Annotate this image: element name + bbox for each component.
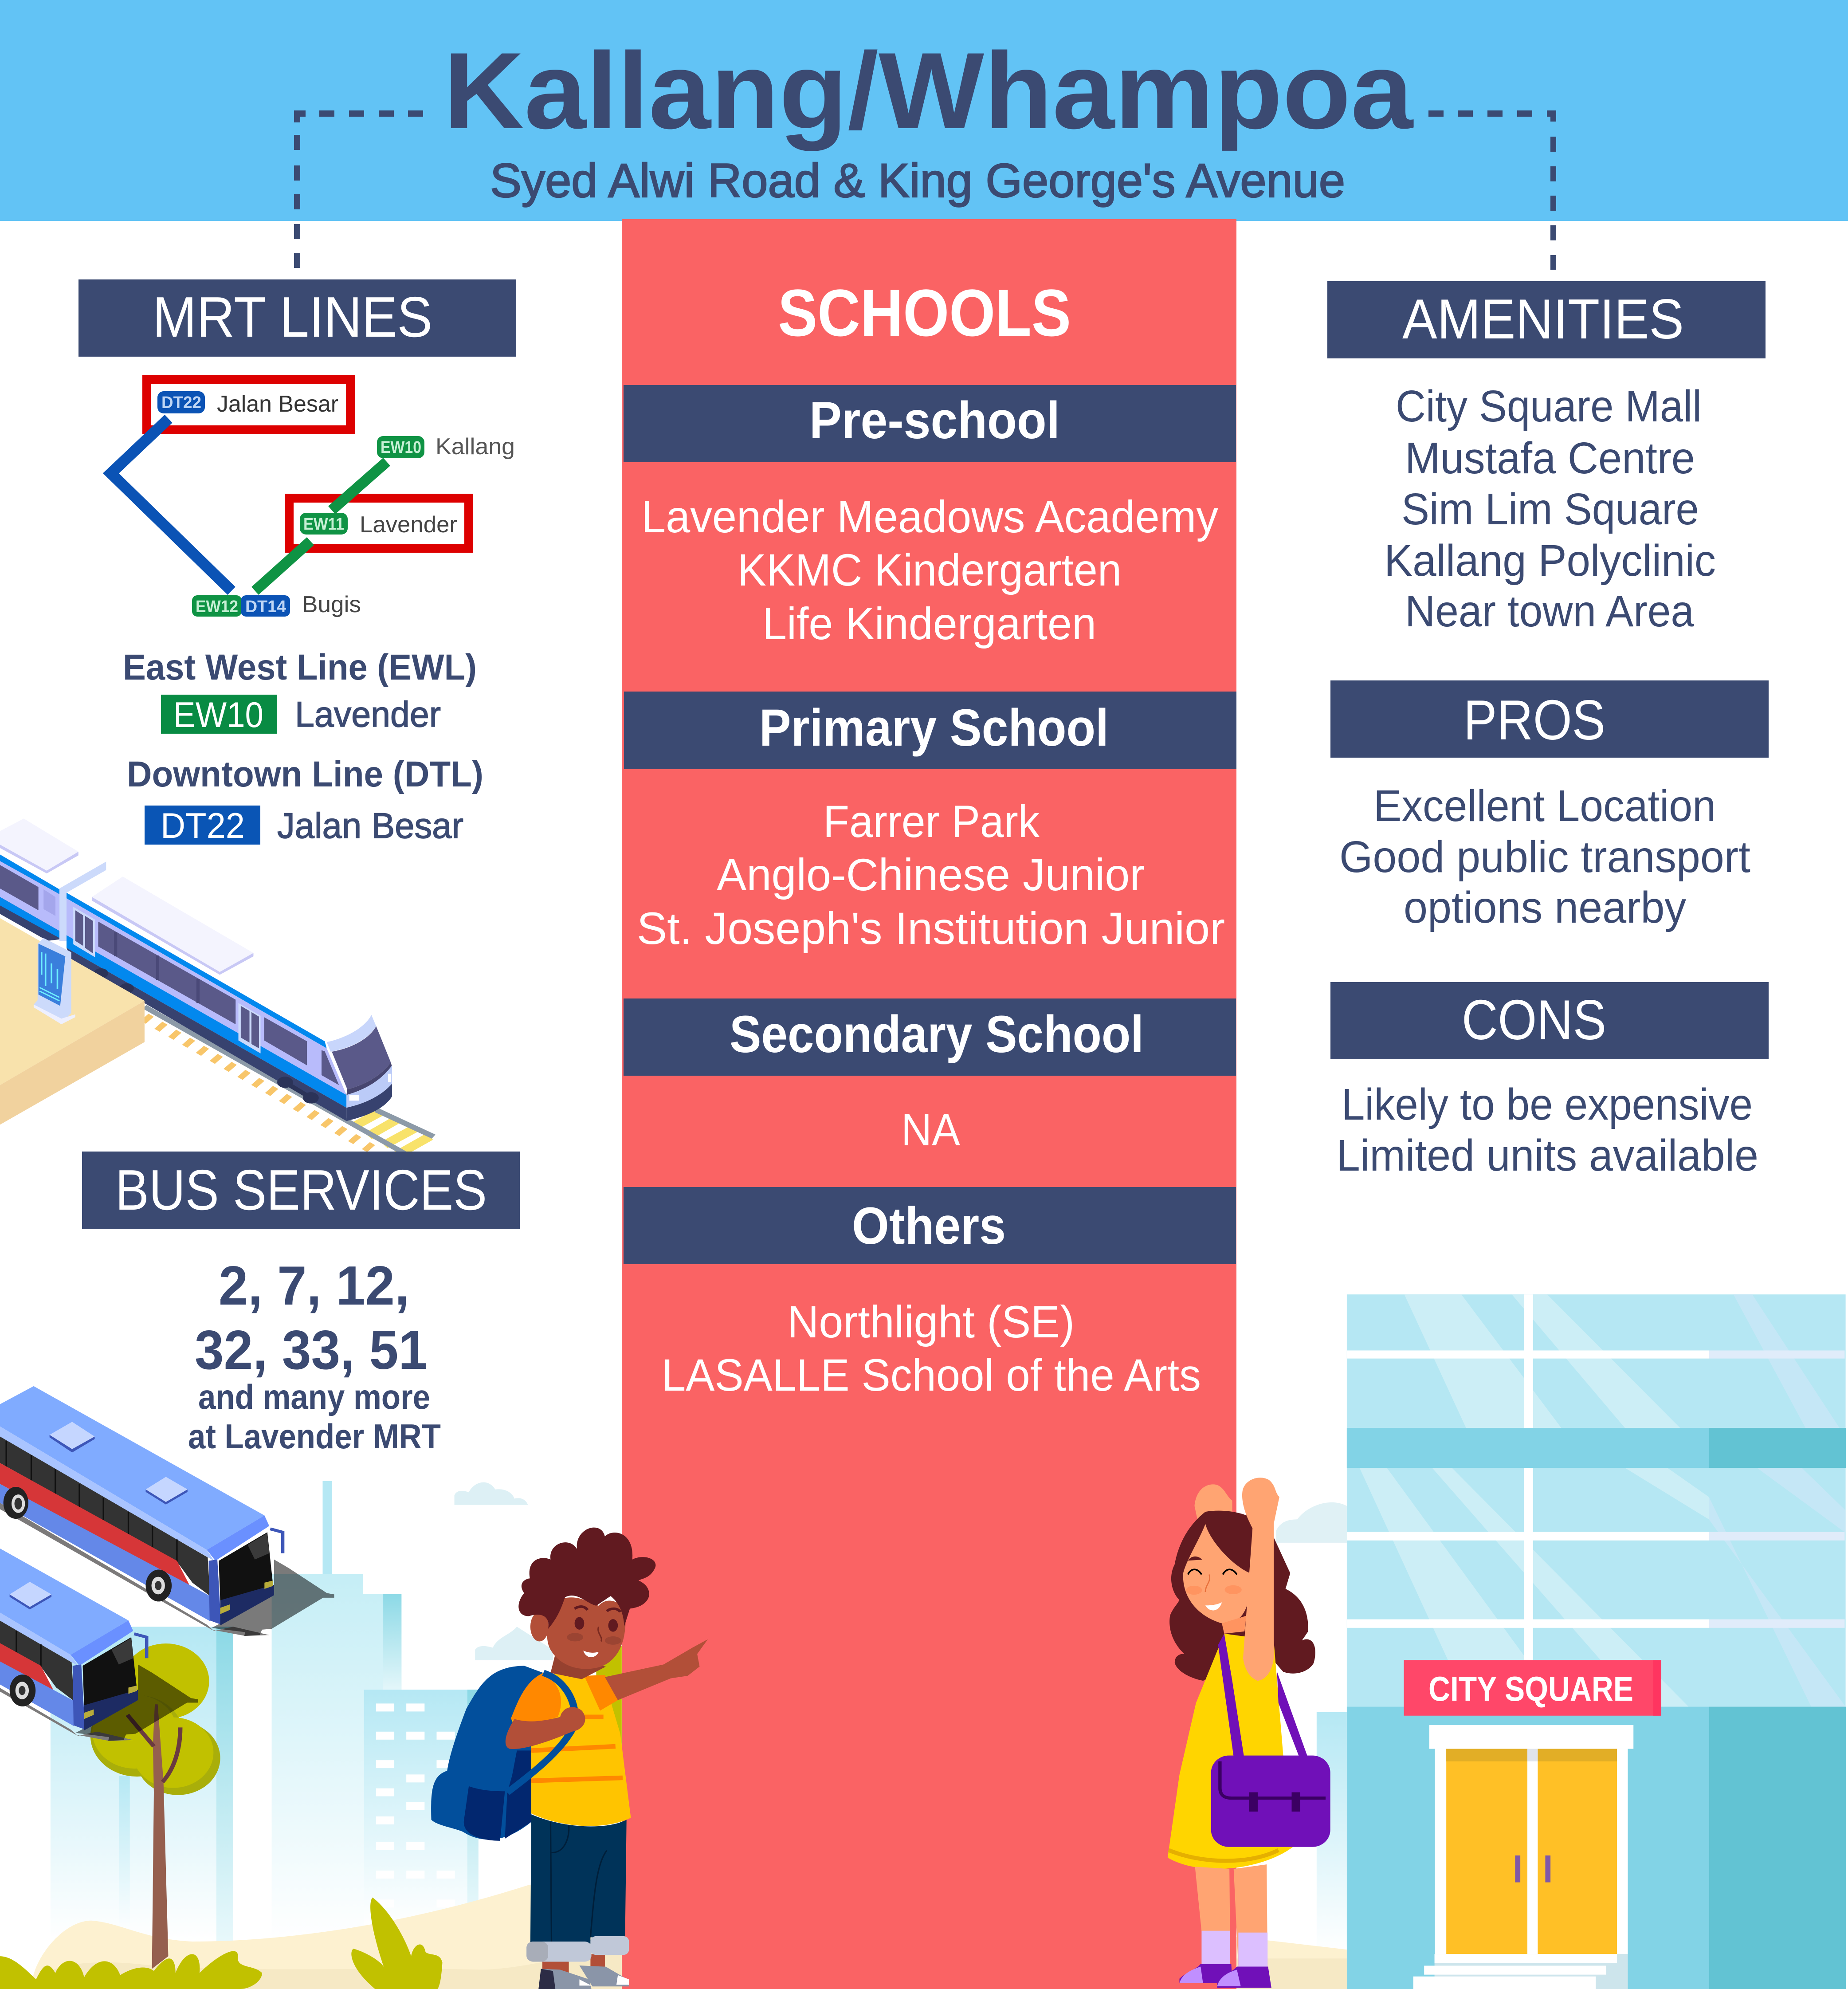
- panel: schools: [622, 219, 1236, 1989]
- bus numbers: at Lavender MRT: [188, 1417, 441, 1456]
- boy legs and shoes: [538, 1954, 629, 1989]
- bus numbers: and many more: [198, 1377, 430, 1416]
- illustration: building backdrop right: [1231, 1294, 1846, 1989]
- secondary school section: [624, 998, 1236, 1155]
- backpack pocket: [464, 1750, 531, 1841]
- MRT map: EW11: [303, 515, 344, 534]
- Downtown Line legend: Downtown Line (DTL): [127, 754, 483, 794]
- panel: cons: [1330, 982, 1769, 1180]
- MRT map: Jalan Besar: [217, 391, 338, 417]
- legs: [1179, 1864, 1271, 1988]
- panel: amenities: City Square Mall: [1396, 381, 1702, 431]
- sign board: [1404, 1660, 1661, 1716]
- MRT map: EW10: [381, 438, 421, 457]
- primary school section: [624, 692, 1236, 954]
- dashed connector: right: [1428, 110, 1556, 270]
- panel: amenities: Near town Area: [1405, 586, 1694, 636]
- train: [0, 847, 392, 1121]
- face: [1183, 1524, 1250, 1623]
- others section: [624, 1187, 1236, 1400]
- panel: amenities: AMENITIES: [1402, 287, 1684, 350]
- sand: [1231, 1936, 1347, 1989]
- shoulder bag: [1211, 1756, 1330, 1847]
- bag strap: [1218, 1634, 1308, 1757]
- train roof panels: [0, 818, 253, 975]
- title: Kallang/Whampoa: [443, 30, 1414, 151]
- East West Line legend: EW10: [173, 695, 263, 735]
- primary school section: Anglo-Chinese Junior: [717, 849, 1145, 900]
- sand ground: [31, 1876, 622, 1989]
- schools heading: SCHOOLS: [778, 275, 1071, 350]
- pre-school section: Life Kindergarten: [762, 598, 1096, 649]
- skyline: [51, 1481, 479, 1942]
- panel: pros: Good public transport: [1339, 832, 1750, 882]
- Downtown Line legend: Jalan Besar: [277, 806, 463, 846]
- panel: amenities: Sim Lim Square: [1401, 484, 1699, 534]
- panel: pros: PROS: [1463, 688, 1605, 751]
- head: [518, 1528, 655, 1679]
- bus numbers: [188, 1255, 441, 1456]
- bushes: [0, 1898, 442, 1989]
- bus numbers: 2, 7, 12,: [219, 1255, 409, 1317]
- pre-school section: Lavender Meadows Academy: [641, 491, 1218, 542]
- East West Line legend: [123, 647, 477, 735]
- panel: cons: CONS: [1462, 988, 1606, 1051]
- pre-school section: Pre-school: [809, 391, 1060, 450]
- bus: lower: [0, 1491, 198, 1741]
- illustration: boy with backpack: [431, 1528, 708, 1989]
- door: [1413, 1725, 1633, 1989]
- others section: Others: [852, 1197, 1006, 1255]
- primary school section: Primary School: [759, 699, 1109, 757]
- panel: amenities: Mustafa Centre: [1405, 433, 1695, 483]
- track: [145, 1007, 434, 1154]
- backpack: [431, 1666, 543, 1840]
- others section: Northlight (SE): [787, 1297, 1075, 1347]
- subtitle: Syed Alwi Road & King George's Avenue: [490, 153, 1345, 207]
- East West Line legend: Lavender: [295, 695, 441, 735]
- station kiosk: [34, 938, 75, 1024]
- primary school section: Farrer Park: [823, 796, 1040, 847]
- panel: pros: options nearby: [1404, 883, 1686, 932]
- platform: [0, 918, 145, 1125]
- panel: cons: Limited units available: [1336, 1131, 1758, 1180]
- other arm and strap: [506, 1673, 585, 1792]
- City Square building: [1347, 1294, 1846, 1989]
- clouds: [455, 1482, 553, 1660]
- Downtown Line legend: [127, 754, 483, 846]
- panel: pros: Excellent Location: [1373, 781, 1716, 831]
- dress: [1168, 1634, 1294, 1869]
- bus numbers: 32, 33, 51: [195, 1320, 428, 1381]
- raised hand behind head: [1194, 1484, 1232, 1524]
- MRT map: [111, 380, 515, 617]
- shirt: [510, 1673, 631, 1826]
- panel: MRT lines heading: [78, 279, 516, 357]
- illustration: girl with bag: [1168, 1478, 1330, 1988]
- panel: MRT lines heading: MRT LINES: [153, 285, 432, 349]
- cloud and small building: [1276, 1502, 1347, 1954]
- MRT map: Kallang: [436, 434, 515, 460]
- East West Line legend: East West Line (EWL): [123, 647, 477, 688]
- bus: upper: [0, 1386, 334, 1636]
- MRT map: EW12: [196, 597, 238, 616]
- panel: pros: [1330, 680, 1769, 932]
- secondary school section: NA: [901, 1105, 960, 1155]
- boy trousers: [526, 1814, 629, 1961]
- tree: [90, 1643, 220, 1969]
- Downtown Line legend: DT22: [161, 806, 245, 846]
- others section: LASALLE School of the Arts: [662, 1350, 1201, 1400]
- pre-school section: [624, 385, 1236, 649]
- dashed connector: left: [294, 110, 423, 268]
- hair: [1169, 1511, 1315, 1681]
- pre-school section: KKMC Kindergarten: [738, 545, 1122, 595]
- panel: amenities: [1327, 281, 1766, 636]
- raised arm: [1242, 1478, 1279, 1681]
- panel: amenities: Kallang Polyclinic: [1384, 536, 1716, 586]
- header banner: [0, 0, 1848, 221]
- MRT map: Bugis: [302, 592, 361, 617]
- pointing arm: [605, 1639, 708, 1700]
- MRT map: Lavender: [360, 512, 457, 538]
- primary school section: St. Joseph's Institution Junior: [637, 903, 1225, 954]
- sign text: CITY SQUARE: [1428, 1669, 1633, 1708]
- illustration: train at platform: [0, 818, 434, 1154]
- MRT map: DT22: [161, 393, 201, 412]
- panel: cons: Likely to be expensive: [1342, 1080, 1753, 1129]
- MRT map: DT14: [245, 597, 286, 616]
- secondary school section: Secondary School: [730, 1005, 1144, 1064]
- illustration: city skyline, tree and buses: [0, 1386, 622, 1989]
- panel: bus services heading: BUS SERVICES: [115, 1158, 487, 1222]
